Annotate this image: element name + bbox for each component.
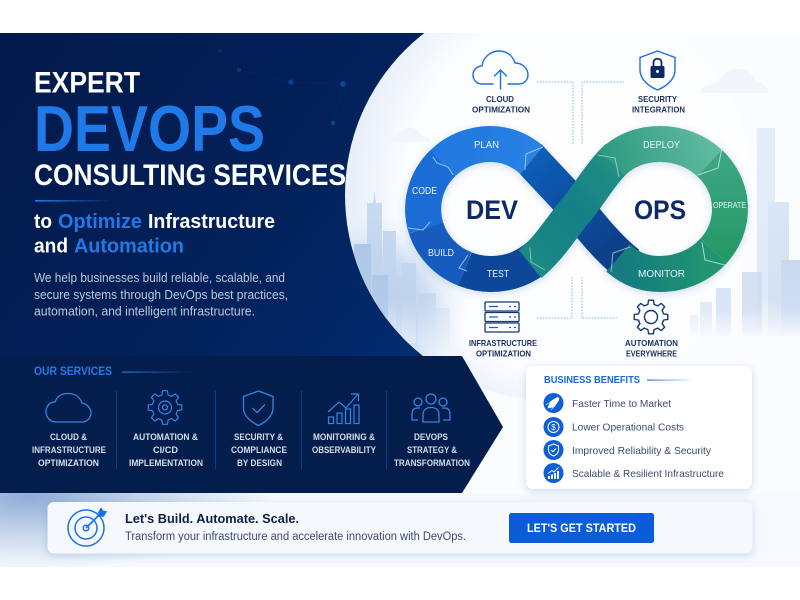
label: cloud optimization: OPTIMIZATION: [472, 104, 530, 114]
benefit: lower operational costs: Lower Operational Costs: [572, 422, 684, 434]
label: automation everywhere: EVERYWHERE: [626, 348, 677, 358]
service: cloud and infrastructure: CLOUD &: [50, 432, 87, 442]
heading: business benefits: BUSINESS BENEFITS: [544, 374, 640, 386]
service: security and compliance: COMPLIANCE: [231, 445, 287, 455]
icon: server stack: [485, 302, 519, 332]
icon: automation gear: [634, 300, 668, 334]
loop labels: DEPLOY: [643, 139, 680, 151]
dotted connectors: [537, 82, 624, 318]
subtitle: and: [34, 236, 68, 258]
segment: plan: [443, 144, 532, 163]
icon: security shield: [640, 51, 675, 90]
benefit: lower operational costs: $: [551, 423, 556, 432]
label: cloud optimization: CLOUD: [486, 94, 514, 104]
segment: code: [423, 163, 443, 228]
subtitle: Optimize: [58, 211, 142, 233]
segment: monitor: [618, 251, 713, 274]
intro paragraph: secure systems through DevOps best practices,: [34, 288, 288, 302]
intro paragraph: automation, and intelligent infrastructure.: [34, 304, 255, 318]
dev label: DEV: [466, 195, 518, 225]
panel: our services: [0, 356, 503, 493]
infinity loop diagram: [423, 144, 730, 274]
skyline right: [690, 128, 800, 336]
service: monitoring and observability: OBSERVABILITY: [312, 445, 376, 455]
skyline left: [354, 190, 450, 346]
loop labels: [412, 139, 746, 280]
cta text: Transform your infrastructure and accelerate innovation with DevOps.: [125, 531, 466, 543]
call to action bar: [48, 502, 752, 554]
benefit: scalable infrastructure: [544, 463, 724, 483]
faint clouds: [387, 69, 768, 142]
loop labels: TEST: [487, 268, 509, 280]
segment: operate: [710, 163, 730, 251]
loop labels: OPERATE: [713, 200, 746, 210]
heading: consulting services: CONSULTING SERVICES: [34, 159, 346, 192]
segment: test: [465, 255, 540, 274]
service: automation and ci/cd: [129, 432, 203, 468]
service: devops strategy: STRATEGY &: [407, 445, 457, 455]
service labels: [32, 432, 470, 468]
service: monitoring and observability: MONITORING &: [313, 432, 375, 442]
fold highlights: [408, 147, 725, 272]
heading: expert: EXPERT: [34, 66, 140, 100]
heading: our services: OUR SERVICES: [34, 364, 112, 378]
white orb: [345, 0, 755, 400]
service: monitoring and observability: [312, 432, 376, 455]
segment: deploy: [612, 144, 710, 163]
subtitle: [34, 211, 275, 258]
service: automation and ci/cd: AUTOMATION &: [133, 432, 198, 442]
service: cloud and infrastructure: [32, 432, 106, 468]
benefit: lower operational costs: [544, 417, 684, 437]
label: infrastructure optimization: INFRASTRUCTURE: [469, 338, 537, 348]
service: security and compliance: [231, 432, 287, 468]
benefit: faster time to market: Faster Time to Market: [572, 398, 671, 410]
service: devops strategy: DEVOPS: [414, 432, 448, 442]
icon: rising chart: [328, 394, 359, 424]
service: security and compliance: SECURITY &: [234, 432, 283, 442]
service: security and compliance: BY DESIGN: [237, 458, 282, 468]
icon: cloud upload: [473, 51, 528, 89]
network nodes decoration: [218, 49, 346, 125]
label: cloud optimization: [472, 94, 530, 114]
subtitle: to: [34, 211, 52, 233]
panel: business benefits: [526, 366, 752, 489]
benefit: improved reliability: [544, 440, 712, 460]
loop labels: PLAN: [474, 139, 499, 151]
subtitle: Infrastructure: [148, 211, 275, 233]
service: cloud and infrastructure: INFRASTRUCTURE: [32, 445, 106, 455]
service: devops strategy: [394, 432, 470, 468]
intro paragraph: [34, 271, 288, 318]
heading: devops: DEVOPS: [34, 92, 265, 165]
icon: shield check: [244, 391, 273, 426]
loop labels: MONITOR: [638, 268, 685, 280]
service: automation and ci/cd: CI/CD: [153, 445, 179, 455]
cta button: [509, 513, 654, 543]
loop labels: BUILD: [428, 247, 454, 259]
icon: cloud: [46, 394, 91, 422]
label: automation everywhere: [625, 338, 678, 358]
intro paragraph: We help businesses build reliable, scalable, and: [34, 271, 285, 285]
ops label: OPS: [634, 195, 686, 225]
label: automation everywhere: AUTOMATION: [625, 338, 678, 348]
icon: target with arrow: [68, 508, 106, 546]
cta heading: Let's Build. Automate. Scale.: [125, 511, 299, 526]
dark hero panel: [0, 33, 445, 359]
title: [34, 66, 346, 192]
band: blue crossing: [528, 156, 628, 264]
icon: team: [412, 394, 450, 422]
service: devops strategy: TRANSFORMATION: [394, 458, 470, 468]
service: cloud and infrastructure: OPTIMIZATION: [38, 458, 99, 468]
orb haze: [345, 0, 755, 400]
title divider: [35, 200, 115, 202]
benefit: scalable infrastructure: Scalable & Resilient Infrastructure: [572, 468, 724, 480]
loop labels: CODE: [412, 185, 437, 197]
band: green crossing: [530, 157, 618, 264]
label: security integration: SECURITY: [638, 94, 677, 104]
label: security integration: [632, 94, 685, 114]
service: automation and ci/cd: IMPLEMENTATION: [129, 458, 203, 468]
subtitle: Automation: [74, 236, 184, 258]
benefit: improved reliability: Improved Reliability & Security: [572, 445, 712, 457]
label: infrastructure optimization: [469, 338, 537, 358]
segment: build: [426, 228, 465, 269]
label: infrastructure optimization: OPTIMIZATION: [476, 348, 531, 358]
benefit: faster time to market: [544, 393, 671, 413]
label: security integration: INTEGRATION: [632, 104, 685, 114]
icon: gear: [148, 391, 182, 424]
cta button: LET'S GET STARTED: [527, 521, 636, 535]
